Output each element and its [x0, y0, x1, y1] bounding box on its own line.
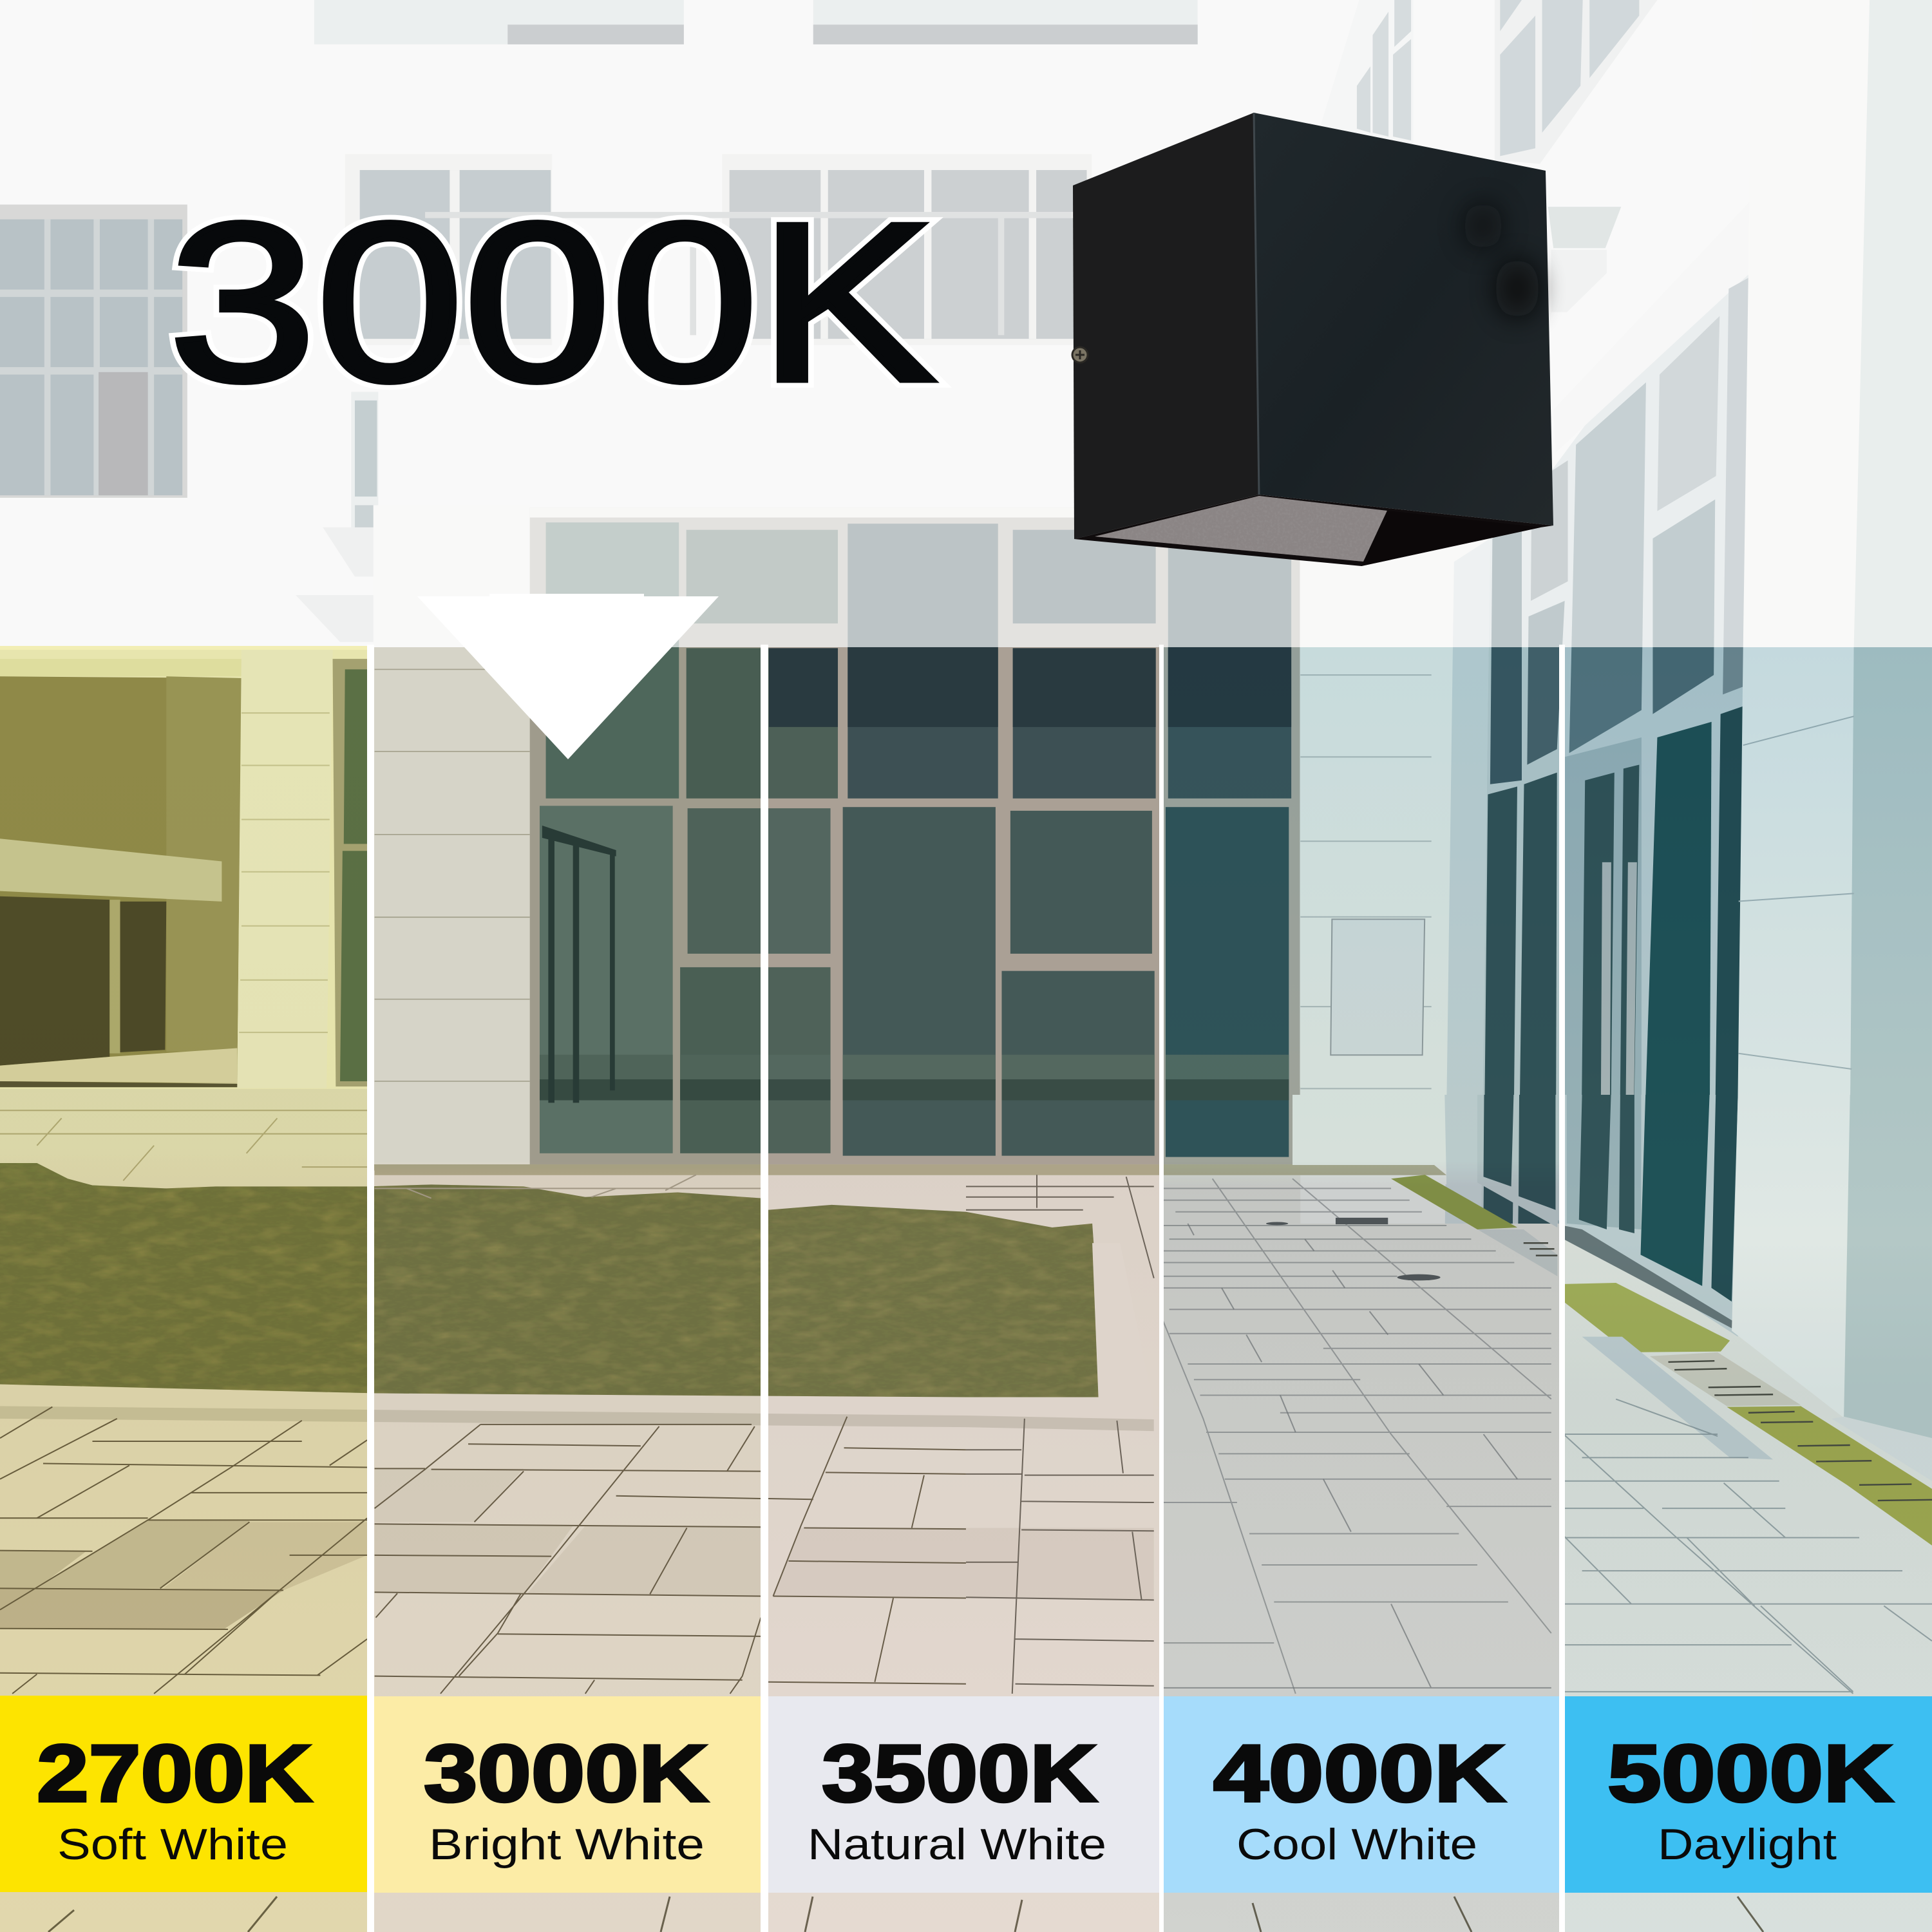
- strip drain at facade base: [374, 1164, 1421, 1171]
- swatch: 3000K: 3000K: [424, 1728, 708, 1819]
- lower wall block: [0, 647, 1932, 1164]
- swatch: 3000K: Bright White: [429, 1820, 705, 1869]
- swatch: 2700K: Soft White: [57, 1820, 288, 1869]
- drain strips: [375, 1165, 1932, 1546]
- swatch: 4000K: [1164, 1696, 1559, 1893]
- pavement joints right: [966, 1175, 1932, 1694]
- glass facade: [530, 507, 1300, 1164]
- swatch: 2700K: 2700K: [37, 1728, 312, 1819]
- white wash over upper photo: [0, 0, 1932, 647]
- right wall and recessed facade: [1300, 0, 1932, 1224]
- main heading: 3000K: [169, 176, 935, 428]
- swatch: 3500K: Natural White: [808, 1820, 1106, 1869]
- darker paving tiles: [0, 1468, 1154, 1629]
- lower right structure: [1293, 1095, 1932, 1481]
- curb grey strip: [0, 1406, 1154, 1431]
- pavement joints left: [0, 1110, 966, 1694]
- swatch: 3500K: 3500K: [822, 1728, 1097, 1819]
- band dividers: [367, 645, 1565, 1932]
- yellow horizon strip: [0, 646, 367, 650]
- wall tile joints: [1300, 675, 1432, 1088]
- swatch: 4000K: 4000K: [1213, 1728, 1506, 1819]
- swatch: 2700K: [0, 1696, 367, 1892]
- glazing panes: [1483, 277, 1750, 1224]
- swatch: 3500K: [768, 1696, 1159, 1893]
- product screw: [1072, 347, 1088, 363]
- paved ground: [0, 1087, 1932, 1932]
- swatch: 5000K: 5000K: [1607, 1728, 1893, 1819]
- white pillar: [374, 505, 530, 1166]
- swatch: 5000K: [1565, 1696, 1932, 1893]
- manhole covers: [1266, 1218, 1441, 1280]
- swatch: 4000K: Cool White: [1236, 1820, 1477, 1869]
- corner column: [1736, 0, 1870, 1224]
- pillar tile joints: [375, 669, 530, 1081]
- product: black cube wall light: [1072, 113, 1553, 567]
- electrical box: [1331, 919, 1425, 1055]
- column tile joints: [1739, 716, 1854, 1069]
- lawn: [0, 1159, 1108, 1417]
- pointer triangle: [417, 594, 719, 759]
- left opening with interior: [0, 649, 367, 1089]
- main heading: 3000K: [169, 176, 935, 428]
- column shaded side: [1850, 0, 1932, 1224]
- swatch: 5000K: Daylight: [1658, 1820, 1837, 1869]
- lawn curb: [0, 1243, 1154, 1419]
- colour temperature tints: [0, 647, 1932, 1932]
- top right windows: [1321, 0, 1657, 312]
- swatch: 3000K: [374, 1696, 761, 1893]
- bottom strip joints: [48, 1897, 1763, 1932]
- upper storey windows: [0, 0, 1198, 642]
